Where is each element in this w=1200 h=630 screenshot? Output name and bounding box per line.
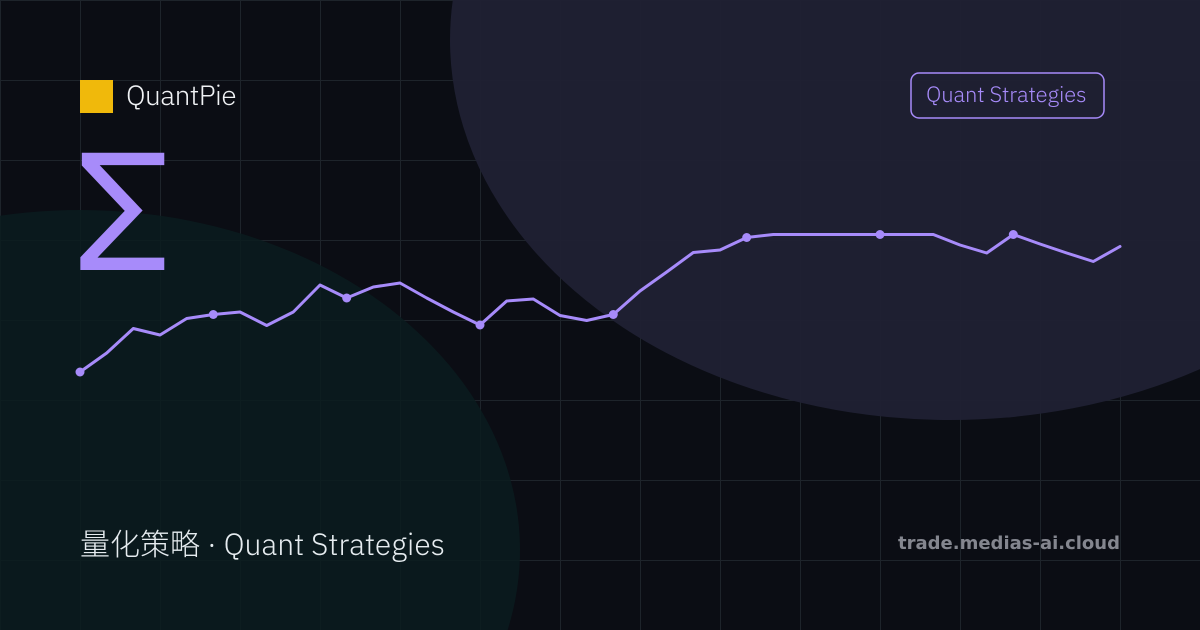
icon: sigma: Σ (73, 98, 175, 316)
domain: trade.medias-ai.cloud (898, 533, 1120, 554)
background ellipse: green (0, 210, 520, 630)
subtitle: 量化策略 · Quant Strategies (80, 525, 445, 564)
line chart (76, 230, 1120, 376)
background ellipse: purple (450, 0, 1200, 420)
tag badge (911, 73, 1104, 118)
brand name: QuantPie (126, 76, 236, 113)
logo square (80, 80, 113, 113)
tag badge: Quant Strategies (926, 80, 1086, 109)
